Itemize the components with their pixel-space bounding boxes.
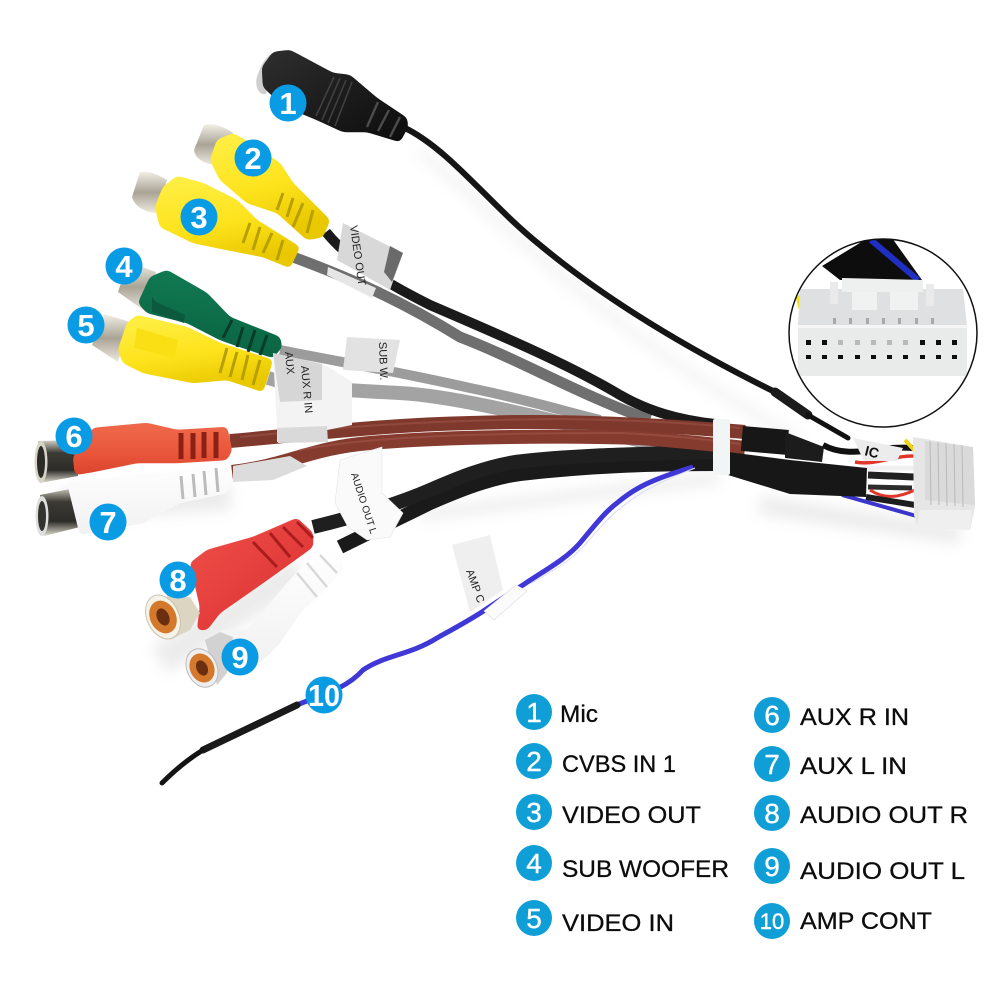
label: AUX R IN: AUX xyxy=(282,351,296,375)
legend: right column: AMP CONT xyxy=(800,908,932,935)
callout badges: 8 xyxy=(169,563,187,598)
callout badges: 10 xyxy=(308,678,340,713)
callout badges: 3 xyxy=(190,200,208,235)
legend: left column: Mic xyxy=(560,701,598,728)
plug 9: white RCA xyxy=(180,547,343,692)
legend: right column: 6 xyxy=(764,700,780,731)
plug 8: red RCA xyxy=(139,518,313,645)
label: VIDEO OUT: VIDEO OUT xyxy=(347,225,367,287)
cable: mic black cable xyxy=(405,128,848,438)
legend: right column xyxy=(754,697,968,939)
legend: left column: 4 xyxy=(526,848,542,879)
legend: left column xyxy=(516,694,729,937)
callout badges: 1 xyxy=(279,86,297,121)
legend: right column: 8 xyxy=(764,798,780,829)
legend: right column: AUDIO OUT R xyxy=(800,802,968,829)
plug 4: green RCA xyxy=(118,262,282,358)
legend: right column: AUDIO OUT L xyxy=(800,858,965,885)
plug 2: yellow RCA xyxy=(194,124,330,240)
callout badges: 6 xyxy=(65,419,83,454)
inset: connector close-up xyxy=(789,238,977,427)
cable: blue amp wire xyxy=(297,467,695,705)
label: SUB WOOFER xyxy=(343,337,400,381)
cable: black heat-shrink tail xyxy=(162,705,297,783)
legend: right column: 9 xyxy=(764,851,780,882)
label: AUX R IN: AUX R IN xyxy=(298,365,314,414)
legend: left column: 3 xyxy=(526,797,542,828)
main connector with wires xyxy=(713,419,975,530)
label: VIDEO OUT xyxy=(327,223,403,298)
legend: right column: 10 xyxy=(760,909,784,934)
label: AUDIO OUT L xyxy=(335,447,403,540)
legend: right column: AUX R IN xyxy=(800,704,909,731)
plug 1: mic jack xyxy=(256,50,408,142)
soft shadows xyxy=(60,150,960,660)
cable: gray sub woofer and video in cables xyxy=(268,350,680,450)
legend: left column: 5 xyxy=(526,903,542,934)
label: AUDIO OUT L: AUDIO OUT L xyxy=(348,472,378,536)
callout badges: 9 xyxy=(231,640,249,675)
main connector with wires: IC xyxy=(863,442,881,461)
legend: left column: 2 xyxy=(526,746,542,777)
cable: brown aux cables xyxy=(230,419,745,472)
label: AMP CONT xyxy=(452,535,527,620)
legend: left column: CVBS IN 1 xyxy=(562,751,676,778)
legend: left column: VIDEO OUT xyxy=(562,802,701,829)
cable: gray and black video cables xyxy=(293,232,715,424)
label: AMP CONT: AMP C xyxy=(463,568,486,605)
callout badges xyxy=(56,84,342,714)
legend: left column: 1 xyxy=(526,697,542,728)
label: AUX R IN xyxy=(273,351,352,443)
callout badges: 7 xyxy=(99,505,117,540)
callout badges: 5 xyxy=(77,308,95,343)
legend: left column: SUB WOOFER xyxy=(562,856,729,883)
legend: left column: VIDEO IN xyxy=(562,910,674,937)
plug 5: yellow RCA xyxy=(92,314,273,392)
plug 6: red RCA xyxy=(34,423,232,483)
cable: black audio out cables xyxy=(313,452,720,547)
legend: right column: AUX L IN xyxy=(800,753,907,780)
callout badges: 4 xyxy=(115,249,133,284)
plug 3: yellow RCA xyxy=(132,172,300,268)
label: SUB WOOFER: SUB W. xyxy=(376,342,389,381)
legend: right column: 7 xyxy=(764,749,780,780)
plug 7: white RCA xyxy=(36,456,307,536)
callout badges: 2 xyxy=(244,141,262,176)
